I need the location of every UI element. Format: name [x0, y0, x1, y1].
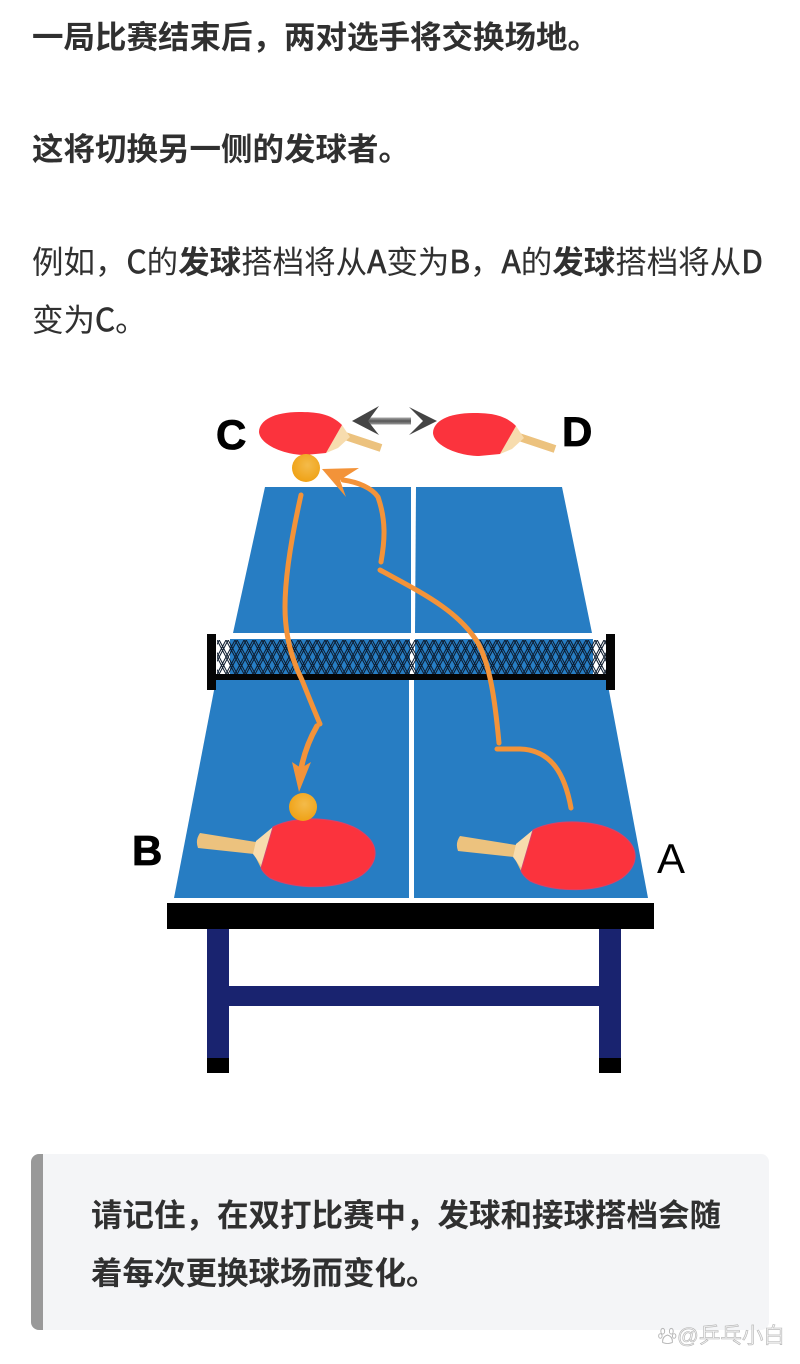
callout accent bar: [31, 1154, 43, 1330]
watermark paw icon: [658, 1328, 676, 1344]
arrow: serve path from C to B: [285, 495, 320, 792]
label D: D: [562, 408, 592, 455]
callout: reminder: [31, 1154, 769, 1330]
table surface: [174, 487, 648, 898]
net: [207, 634, 615, 690]
text: example line 1: 例如，C的发球搭档将从A变为B，A的发球搭档将从D: [32, 237, 763, 283]
ball at C: [292, 454, 320, 482]
paddle C: [259, 412, 381, 455]
arrow: swap between C and D: [352, 406, 437, 435]
text: server switch heading: 这将切换另一侧的发球者。: [32, 124, 410, 170]
callout text line 2: 着每次更换球场而变化。: [91, 1248, 438, 1294]
ball at B: [289, 793, 317, 821]
callout text line 1: 请记住，在双打比赛中，发球和接球搭档会随: [91, 1190, 721, 1236]
arrow: return path from A to C: [322, 468, 571, 808]
text: example line 2: 变为C。: [32, 295, 147, 341]
text: example paragraph: [32, 237, 763, 341]
label A: A: [657, 835, 685, 882]
paddle D: [433, 413, 555, 456]
paddle A: [457, 822, 635, 890]
label B: B: [132, 827, 162, 874]
text: game end heading: 一局比赛结束后，两对选手将交换场地。: [32, 12, 599, 58]
label C: C: [216, 411, 246, 458]
watermark: @乒乓小白: [677, 1324, 785, 1348]
paddle B: [197, 819, 375, 887]
table frame and legs: [167, 903, 654, 1073]
